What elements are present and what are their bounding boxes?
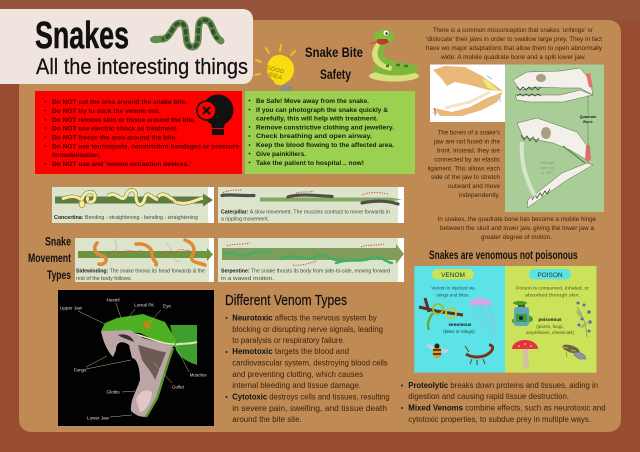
label: jaw opening: to 150° (541, 171, 554, 175)
venom definition: stings and bites. (436, 293, 470, 298)
arrow (55, 194, 213, 206)
icon: red mushroom (512, 340, 538, 369)
heading: snake bite safety: Snake Bite (305, 44, 363, 60)
anatomy labels: Loreal Pit (134, 302, 154, 308)
caption: Sidewinding: The snake throws its head forwards & the (76, 268, 205, 274)
label: quadrate bone: Quadrate (580, 115, 596, 119)
list: venom types: Cytotoxic destroys cells and tissues, resulting (232, 392, 390, 402)
list: venom types: Hemotoxic targets the blood and (232, 347, 349, 356)
icon: crossed-out bulb (197, 94, 234, 135)
icon: cartoon green snake (369, 30, 419, 82)
list: venom types: blocking or disrupting nerve signals, leading (232, 325, 383, 334)
snake upper head (101, 314, 176, 347)
text block: jaw bones: connected by an elastic (434, 156, 501, 164)
open skull (517, 118, 593, 208)
panel: do not list: Do NOT use tourniquets, constriction bandages or pressure (52, 144, 239, 150)
text block: jaw bones: The bones of a snake’s (438, 130, 501, 136)
venomous caption: venomous (449, 322, 472, 327)
caption: a rippling movement. (221, 216, 269, 222)
panel: do list: Keep the blood flowing to the affected area. (256, 142, 394, 149)
list: more venom types (401, 381, 606, 424)
snake silhouettes (222, 195, 398, 204)
anatomy labels: Glottis (106, 390, 120, 394)
panel: do list: carefully, this will help with treatment. (256, 116, 378, 122)
icon: good idea light bulb: GOOD (265, 65, 285, 76)
title banner (0, 9, 253, 84)
list: more venom types: digestion and causing rapid tissue destruction. (408, 392, 569, 401)
heading: snake bite safety: Safety (320, 66, 351, 82)
list: venom types (226, 314, 390, 424)
icon: berry plant (576, 302, 592, 337)
panel: do list (245, 91, 415, 174)
label: jaw opening: open up (540, 166, 554, 170)
icon: good idea light bulb (255, 45, 295, 94)
label: quadrate bone: Bone (583, 120, 593, 124)
snake tracks (62, 190, 203, 206)
panel: sidewinding movement (75, 238, 214, 282)
text block: jaw misconception: There is a common misconception that snakes ‘unhinge’ or (433, 27, 594, 34)
title: Snakes (35, 15, 129, 57)
anatomy labels (60, 298, 207, 420)
poisonous caption: amphibians, chemicals) (526, 330, 574, 335)
text block: quadrate hinge: between the skull and lower jaw, giving the lower jaw a (440, 225, 594, 232)
snake body (170, 325, 197, 365)
arc arrow (522, 142, 535, 196)
panel: do not list: Do NOT cut the area around the snake bite. (52, 99, 187, 106)
panel: caterpillar movement (218, 187, 404, 223)
poisonous caption: poisonous (538, 317, 562, 322)
mouth interior (101, 330, 173, 417)
subtitle: All the interesting things (36, 54, 248, 79)
list: venom types: and preventing clotting, which causes (232, 370, 363, 379)
text block: jaw bones: front. Instead, they are (437, 148, 500, 154)
text block: quadrate hinge: greater degree of motion. (481, 234, 552, 241)
panel: venom (414, 266, 505, 373)
text block: quadrate hinge (438, 216, 596, 241)
heading: venomous not poisonous: Snakes are venomous not poisonous (429, 250, 578, 262)
anatomy labels: Eye (163, 304, 171, 308)
photo: labelled snake head anatomy (58, 290, 214, 426)
list: venom types: in severe pain, swelling, and tissue death (232, 404, 387, 413)
panel: do not list: Do NOT remove skin or tissue around the bite. (52, 117, 196, 124)
heading: snake movement types (28, 234, 71, 282)
venom definition (431, 286, 475, 298)
icon: title snake (150, 20, 221, 47)
orange snakes (95, 240, 205, 265)
text block: jaw bones (428, 130, 501, 199)
text block: quadrate hinge: In snakes, the quadrate bone has become a mobile hinge (438, 216, 596, 223)
icon: poison bottle (512, 301, 533, 326)
panel: do list: Be Safe! Move away from the snake. (256, 98, 369, 105)
poisonous caption (526, 317, 574, 335)
text block: jaw bones: ligament. This allows each (428, 166, 500, 172)
icon: scorpion (465, 345, 493, 365)
poison definition (516, 286, 590, 298)
label: quadrate bone (580, 115, 596, 124)
text block: jaw bones: independently. (459, 192, 500, 199)
poison definition: Poison is consumed, inhaled, or (516, 286, 590, 291)
anatomy labels: Fangs (74, 368, 87, 372)
caption: Caterpillar: A slow movement. The muscles contract to move forwards in (221, 210, 390, 216)
arrow (78, 248, 213, 261)
poison definition: absorbed through skin. (525, 293, 580, 298)
green snakes (224, 252, 392, 263)
caption (76, 268, 205, 282)
poisonous caption: (plants, fungi, (536, 324, 564, 329)
panel: poison (505, 266, 596, 373)
caption: rest of the body follows. (76, 276, 132, 282)
heading: different venom types: Different Venom Types (225, 293, 347, 309)
panel: concertina movement (52, 187, 214, 223)
panel: do list: If you can photograph the snake quickly & (256, 107, 388, 114)
panel: do not list: Do NOT use and ‘venom extraction devices.’ (52, 161, 191, 168)
label: jaw opening: Jaw can (540, 161, 554, 165)
venomous caption: (bites or stings) (443, 329, 475, 334)
pill: venom: VENOM (441, 272, 465, 279)
text block: jaw misconception: wide: A mobile quadrate bone and a split lower jaw. (440, 54, 586, 61)
text block: jaw bones: side of the jaw to stretch (431, 174, 500, 181)
anatomy labels: Muscles (190, 372, 207, 378)
caption: Concertina: Bending - straightening - bending - straightening (54, 215, 198, 221)
lower jaw edge (146, 348, 173, 417)
icon: snake on branch (419, 298, 463, 330)
caption (221, 210, 390, 222)
venom definition: Venom is injected via (431, 286, 475, 291)
panel: do list: Give painkillers. (256, 151, 306, 158)
panel: do not list: Do NOT freeze the area around the bite. (52, 134, 177, 142)
red motion dots (223, 190, 388, 195)
list: venom types: around the bite site. (232, 415, 302, 424)
list: venom types: internal bleeding and tissue damage. (232, 381, 361, 390)
panel: do list: Remove constrictive clothing and jewellery. (256, 124, 394, 132)
arrow (222, 244, 404, 264)
icon: good idea light bulb: IDEA (267, 72, 284, 82)
list: venom types: cardiovascular system, destroying blood cells (232, 358, 388, 368)
text block: jaw misconception: ‘dislocate’ their jaws in order to swallow large prey. They in fact (426, 36, 602, 43)
text block: jaw bones: jaw are not fused in the (433, 138, 500, 146)
panel: do list: Take the patient to hospital .. now! (256, 160, 364, 167)
diagram: skull open and closed with quadrate bone (505, 64, 604, 212)
heading: snake movement types: Movement (28, 251, 71, 265)
list: more venom types: Mixed Venoms combine effects, such as neurotoxic and (408, 404, 606, 412)
panel: do not list: Do NOT use electric shock as treatment. (52, 126, 178, 132)
heading: snake bite safety (305, 44, 363, 82)
panel: do not list: immobilisation. (52, 152, 101, 159)
caption: Serpentine: The snake thrusts its body from side-to-side, moving forward (221, 268, 390, 274)
icon: jellyfish (469, 298, 497, 340)
pointer lines (78, 303, 189, 417)
pill: poison: POISON (537, 272, 563, 279)
text block: jaw misconception: have wo major adaptations that allow them to open abnormally (426, 45, 603, 52)
list: venom types: to paralysis or respiratory failure. (232, 336, 345, 345)
panel: serpentine movement (218, 238, 404, 282)
heading: snake movement types: Snake (45, 234, 71, 248)
arrow (260, 198, 402, 202)
diagram: orange snake jaw (430, 64, 505, 122)
list: more venom types: Proteolytic breaks down proteins and tissues, aiding in (408, 381, 598, 390)
heading: snake movement types: Types (47, 268, 71, 282)
venomous caption (443, 322, 475, 334)
icon: poison frog (561, 343, 586, 359)
anatomy labels: Nostril (106, 298, 120, 302)
list: venom types: Neurotoxic affects the nervous system by (232, 314, 377, 322)
panel: do not list (35, 91, 242, 174)
caption: in a waved motion. (221, 276, 274, 282)
panel: do not list: Do NOT try to suck the venom out. (52, 108, 160, 115)
closed skull (513, 68, 593, 102)
text block: jaw misconception (426, 27, 603, 61)
text block: jaw bones: outward and move (448, 183, 500, 190)
panel: do list: Check breathing and open airway. (256, 133, 372, 140)
caption (221, 268, 390, 282)
red motion dots (227, 243, 384, 265)
anatomy labels: Gullet (172, 384, 185, 390)
anatomy labels: Upper Jaw (60, 306, 83, 310)
label: jaw opening (540, 161, 554, 175)
anatomy labels: Lower Jaw (87, 416, 110, 420)
icon: bee (426, 342, 449, 358)
list: more venom types: cytotoxic properties, to subdue prey in multiple ways. (408, 415, 591, 424)
